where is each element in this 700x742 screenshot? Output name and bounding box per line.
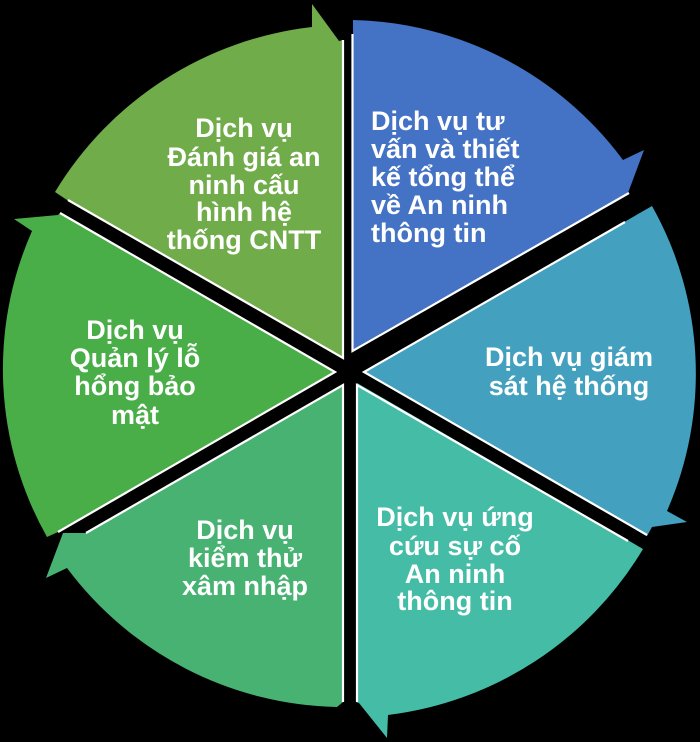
label: vulnerability management: Dịch vụ: [86, 315, 184, 345]
label: design consulting: thông tin: [371, 218, 486, 248]
label: vulnerability management: mật: [111, 400, 159, 430]
label: incident response: thông tin: [397, 586, 513, 616]
label: penetration testing: xâm nhập: [182, 571, 308, 601]
segment: configuration assessment (olive): [55, 4, 343, 358]
label: configuration assessment: Đánh giá an: [167, 142, 321, 172]
label: configuration assessment: ninh cấu: [188, 170, 300, 200]
segment: design consulting (blue): [352, 20, 644, 351]
label: design consulting: về An ninh: [371, 190, 508, 220]
label: penetration testing: Dịch vụ: [196, 515, 294, 545]
label: vulnerability management: Quản lý lỗ: [70, 342, 200, 373]
segment: penetration testing (green): [46, 384, 343, 707]
segment: incident response (teal green): [356, 383, 643, 738]
segment: system monitoring (teal blue): [363, 206, 696, 536]
segment: vulnerability management (bright green): [3, 213, 335, 537]
label: system monitoring: Dịch vụ giám: [485, 342, 653, 372]
label: incident response: An ninh: [405, 559, 505, 589]
label: design consulting: kế tổng thể: [371, 162, 515, 192]
label: configuration assessment: thống CNTT: [167, 225, 322, 255]
label: design consulting: Dịch vụ tư: [371, 106, 505, 136]
label: design consulting: vấn và thiết: [371, 134, 520, 164]
label: configuration assessment: Dịch vụ: [195, 113, 293, 143]
label: incident response: cứu sự cố: [389, 531, 521, 561]
label: vulnerability management: hổng bảo: [74, 371, 196, 401]
label: system monitoring: sát hệ thống: [489, 371, 649, 401]
label: penetration testing: kiểm thử: [188, 543, 302, 573]
label: configuration assessment: hình hệ: [196, 197, 292, 227]
label: incident response: Dịch vụ ứng: [376, 502, 534, 532]
